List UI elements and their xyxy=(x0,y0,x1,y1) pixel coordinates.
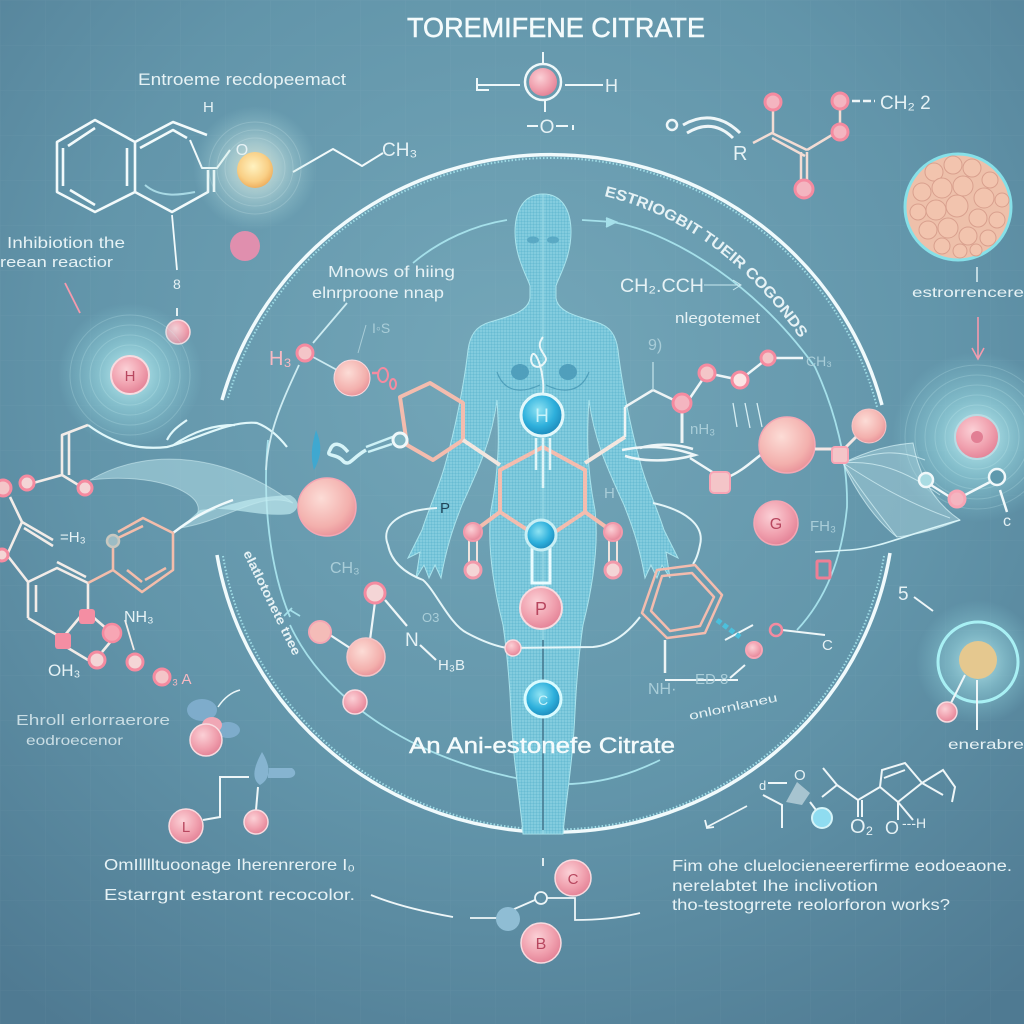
small atoms: top left xyxy=(166,231,260,344)
caption: inner left: elnrproone nnap xyxy=(312,285,444,302)
caption: lower right question: Fim ohe cluelocieneererfirme eodoeaone. xyxy=(672,858,1012,875)
left large molecule: OH₃ xyxy=(48,661,80,680)
right lower atom xyxy=(916,600,1024,730)
subtitle: An Ani-estonefe Citrate xyxy=(409,733,675,758)
inner left molecule: CH₃ xyxy=(330,560,360,577)
human body silhouette xyxy=(408,194,678,834)
central atom column: C xyxy=(538,692,548,708)
caption: top left: Entroeme recdopeemact xyxy=(138,71,346,89)
left large molecule: ₃ A xyxy=(172,671,191,688)
right small molecule: c xyxy=(1003,513,1011,530)
large pink atom: right: G xyxy=(770,516,782,533)
caption: lower left: eodroecenor xyxy=(26,732,123,748)
top left molecule: CH₃ xyxy=(382,140,417,161)
bottom right molecule: O xyxy=(794,767,806,784)
top right fragment xyxy=(667,93,931,198)
caption: inhibition: reean reactior xyxy=(0,254,113,271)
caption: right xyxy=(912,267,1024,300)
formula label xyxy=(620,276,760,327)
top right fragment: R xyxy=(733,143,747,165)
bottom right molecule: d xyxy=(759,778,766,793)
bottom right molecule: O xyxy=(885,818,899,838)
central atom column: P xyxy=(535,599,547,619)
bottom centre molecule: B xyxy=(536,936,546,953)
caption: lower left: Ehroll erlorraerore xyxy=(16,712,170,729)
bottom right molecule xyxy=(759,763,955,838)
central atom column xyxy=(440,394,622,717)
arrow: lower right xyxy=(705,806,747,828)
right mid molecule: 9) xyxy=(648,337,662,354)
caption: right lower: enerabre xyxy=(948,737,1024,752)
central ring molecule xyxy=(400,383,722,673)
bottom centre molecule xyxy=(371,858,640,963)
lower right molecule: onlornlaneu xyxy=(688,691,779,723)
central atom column: H xyxy=(535,406,549,427)
inner thin circle xyxy=(266,218,847,784)
tissue sphere xyxy=(905,154,1011,260)
left mid molecule: I◦S xyxy=(372,320,390,336)
outer circle frame xyxy=(217,155,890,832)
label: five: 5 xyxy=(898,584,909,605)
top left molecule xyxy=(57,99,417,316)
inner left molecule: O3 xyxy=(422,610,439,625)
top centre fragment: O xyxy=(540,117,554,138)
left loop xyxy=(386,503,701,648)
label: five xyxy=(898,584,933,611)
caption: lower right question: nerelabtet Ihe inclivotion xyxy=(672,878,878,895)
caption: lower right question: tho-testogrrete reolorforon works? xyxy=(672,897,950,914)
glowing atom: top left xyxy=(193,106,317,230)
glowing atom: right xyxy=(892,352,1024,522)
top right fragment: CH₂ 2 xyxy=(880,93,931,114)
inner left molecule xyxy=(309,560,465,714)
left mid molecule: H₃ xyxy=(269,348,292,370)
right mid molecule: CH₃ xyxy=(806,353,832,369)
left large molecule xyxy=(0,425,191,688)
wispy ribbon: left xyxy=(88,420,298,533)
caption: lower left explanation xyxy=(104,857,355,904)
right mid molecule: nH₃ xyxy=(690,421,715,438)
glowing atom: top left: O xyxy=(236,142,248,159)
caption: right: estrorrencere xyxy=(912,284,1024,300)
caption: lower left explanation: OmIlllltuoonage Iherenrerore I₀ xyxy=(104,857,355,874)
caption: lower left explanation: Estarrgnt estaront recocolor. xyxy=(104,887,355,904)
large pink atom: left xyxy=(298,478,356,536)
wispy fan: right xyxy=(815,443,960,552)
caption: lower left xyxy=(16,712,170,748)
lower right molecule: NH· xyxy=(648,681,676,698)
glowing atom: left: H xyxy=(125,368,135,385)
lower left chain xyxy=(169,752,295,843)
central atom column: H xyxy=(604,485,615,502)
formula label: CH₂.CCH xyxy=(620,276,704,297)
curved label: estrogen: ESTRIOGBIT TUEIR COGONDS xyxy=(605,186,807,337)
large pink atom: right xyxy=(754,409,886,578)
lower right molecule xyxy=(648,620,833,723)
left mid molecule xyxy=(266,303,407,470)
formula label: nlegotemet xyxy=(675,311,760,327)
lower right molecule: ED 8 xyxy=(695,671,728,688)
caption: inner left: Mnows of hiing xyxy=(328,264,455,281)
inner left molecule: H₃B xyxy=(438,657,465,674)
bottom right molecule: ---H xyxy=(902,815,926,831)
top left molecule: 8 xyxy=(173,276,181,292)
caption: inhibition: Inhibiotion the xyxy=(7,235,125,252)
bottom right molecule: O₂ xyxy=(850,816,873,838)
top left molecule: H xyxy=(203,99,214,116)
rotated side text: elatlotonete tnee xyxy=(240,548,304,658)
top centre fragment xyxy=(477,52,618,138)
caption: inhibition xyxy=(0,235,125,313)
inner left molecule: N xyxy=(405,630,419,651)
caption: inner left xyxy=(312,264,455,302)
top centre fragment: H xyxy=(605,76,618,96)
lower left atoms xyxy=(187,690,240,756)
caption: lower right question xyxy=(672,858,1012,914)
arrow: right xyxy=(972,317,984,359)
left large molecule: =H₃ xyxy=(60,529,86,546)
title: TOREMIFENE CITRATE xyxy=(407,12,705,43)
glowing atom: left xyxy=(58,303,202,447)
large pink atom: right: FH₃ xyxy=(810,518,836,535)
lower left chain: L xyxy=(182,819,190,836)
lower right molecule: C xyxy=(822,637,833,654)
right mid molecule xyxy=(622,337,832,493)
bottom centre molecule: C xyxy=(568,871,579,888)
right small molecule xyxy=(919,469,1011,530)
central atom column: P xyxy=(440,500,450,517)
left large molecule: NH₃ xyxy=(124,609,154,626)
